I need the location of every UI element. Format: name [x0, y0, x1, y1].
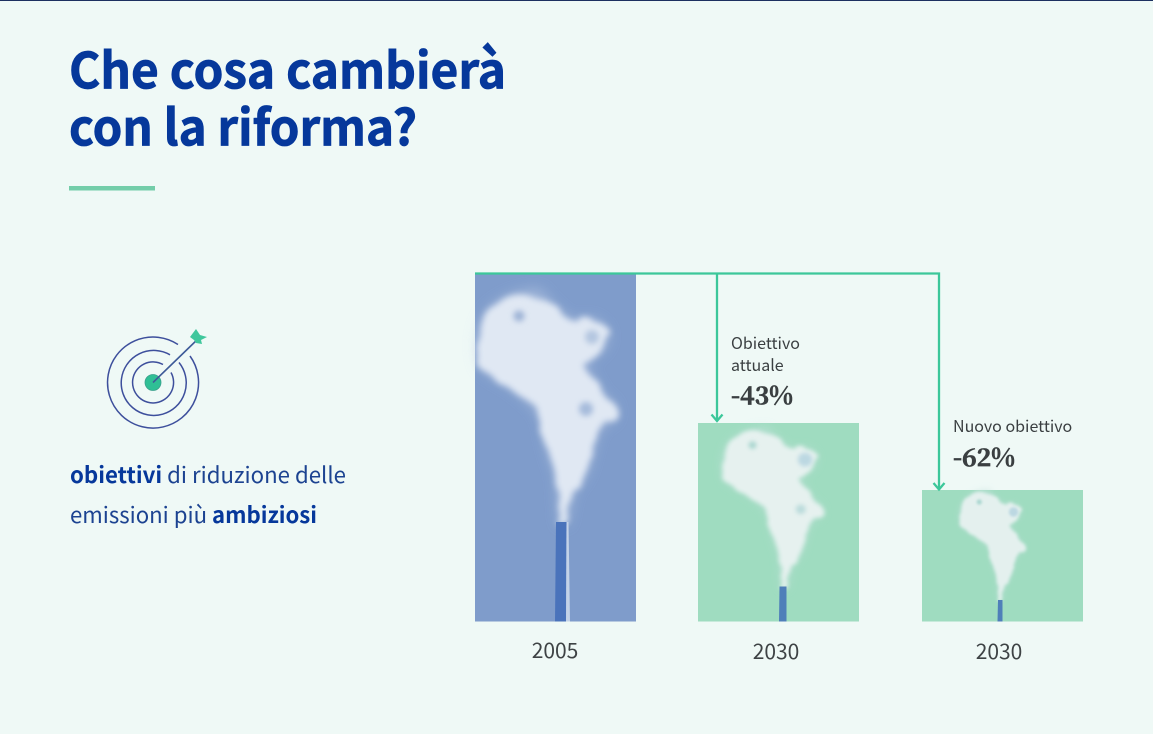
- title underline accent: [69, 186, 155, 190]
- year labels: 2030: [753, 636, 799, 666]
- label: current target: -43%: [731, 376, 793, 411]
- year labels: [532, 635, 1022, 666]
- panel: 2030 new target smoke stack: [922, 490, 1083, 622]
- label: current target: attuale: [731, 352, 784, 376]
- year labels: 2005: [532, 635, 578, 665]
- title: Che cosa cambierà: [69, 32, 506, 104]
- text block: objectives: [70, 458, 346, 530]
- panel: 2005 smoke stack: [475, 274, 636, 622]
- label: new target: [953, 413, 1072, 473]
- text block: objectives: emissioni più ambiziosi: [70, 498, 317, 530]
- label: current target: [731, 330, 800, 411]
- text block: objectives: obiettivi di riduzione delle: [70, 458, 346, 490]
- panel: 2030 current target smoke stack: [698, 423, 859, 622]
- title: con la riforma?: [69, 90, 417, 160]
- label: current target: Obiettivo: [731, 330, 800, 354]
- title: [69, 32, 506, 160]
- year labels: 2030: [976, 636, 1022, 666]
- label: new target: -62%: [953, 438, 1015, 473]
- icon: target with arrow: [108, 329, 207, 428]
- arrow: from 2005 to both 2030 targets: [475, 274, 944, 490]
- label: new target: Nuovo obiettivo: [953, 413, 1072, 437]
